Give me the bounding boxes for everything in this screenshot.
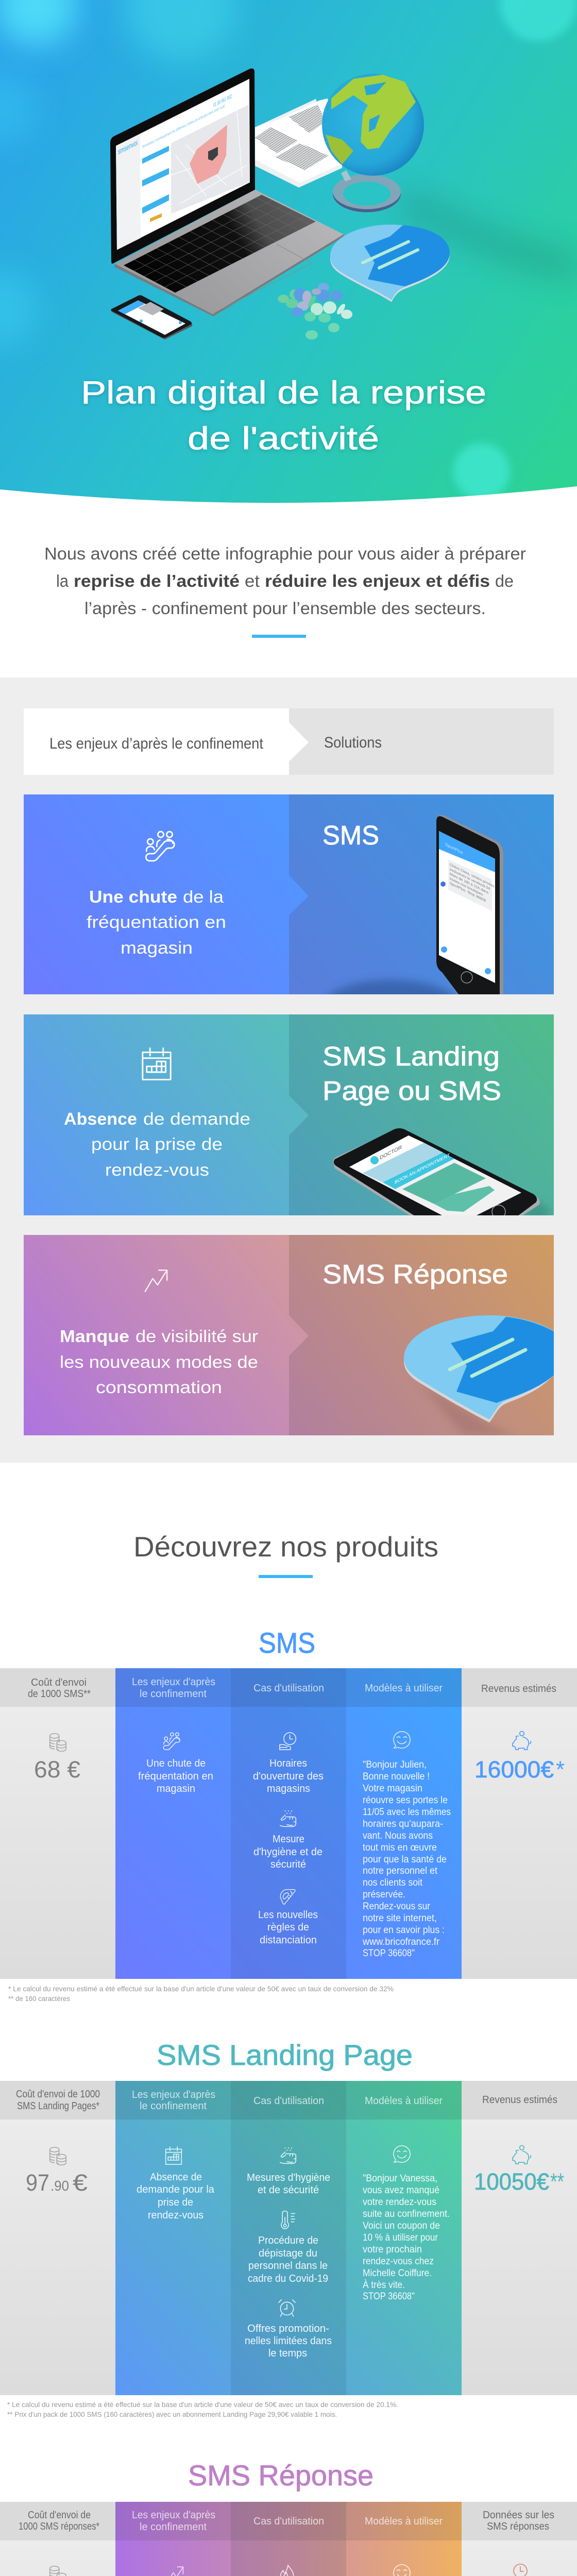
card text: visibility: les nouveaux modes de xyxy=(60,1352,258,1371)
templates column: 11/05 avec les mêmes xyxy=(363,1806,451,1818)
card text: no demand: Absence xyxy=(64,1109,137,1128)
column headers xyxy=(16,2089,557,2112)
use cases column: sécurité xyxy=(270,1859,306,1870)
challenge column xyxy=(137,2147,215,2221)
templates column: "Bonjour Vanessa, xyxy=(363,2173,437,2184)
use cases column: d'ouverture des xyxy=(253,1771,324,1782)
icon: escalator xyxy=(146,832,174,861)
table head row xyxy=(24,708,554,775)
column headers: le confinement xyxy=(140,2100,207,2112)
templates column: 10 % à utiliser pour xyxy=(363,2232,438,2243)
use cases column: distanciation xyxy=(260,1935,317,1946)
intro text block: Nous avons créé cette infographie pour vous aider à préparer xyxy=(44,544,526,563)
card: SMS Landing Page xyxy=(24,1014,554,1221)
card text: no demand xyxy=(64,1109,250,1179)
card: SMS xyxy=(24,794,554,994)
templates column: STOP 36608" xyxy=(363,2291,415,2302)
use cases column: personnel dans le xyxy=(248,2260,328,2272)
card title: SMS Landing Page ou SMS: SMS Landing xyxy=(323,1042,500,1072)
column headers: Coût d'envoi de 1000 xyxy=(16,2089,100,2100)
cost column: 97 xyxy=(26,2170,49,2196)
cost column xyxy=(34,1734,80,1783)
footnotes xyxy=(8,1985,394,2003)
card text: visibility: de visibilité sur xyxy=(135,1327,258,1346)
footnotes: ** de 160 caractères xyxy=(8,1994,70,2003)
illustration: landscape phone xyxy=(333,1128,551,1221)
column headers: SMS Landing Pages* xyxy=(17,2100,99,2112)
card: SMS Réponse xyxy=(24,1235,559,1435)
panel: SMS Landing Page product table xyxy=(0,2039,577,2418)
hero illustration: laptop xyxy=(110,69,344,316)
panel: SMS product table xyxy=(0,1626,577,2003)
column headers xyxy=(19,2510,554,2533)
revenue column: 16000€ xyxy=(474,1756,554,1783)
hero title: Plan digital de la reprise xyxy=(81,375,486,411)
templates column xyxy=(362,1732,451,1959)
footnotes: * Le calcul du revenu estimé a été effectué sur la base d'un article d'une valeur de 50€ avec un taux de conversion de 32% xyxy=(8,1985,394,1993)
column headers: Revenus estimés xyxy=(482,2094,557,2106)
challenge column: fréquentation en xyxy=(138,1771,213,1782)
card text: store traffic: de la xyxy=(183,887,224,906)
cost column: 68 € xyxy=(34,1756,80,1783)
column headers xyxy=(28,1676,556,1700)
revenue column xyxy=(474,1731,565,1783)
section background xyxy=(0,677,577,1463)
card title: SMS: SMS xyxy=(323,821,379,851)
intro text block xyxy=(44,544,526,618)
card text: store traffic: fréquentation en xyxy=(87,912,226,931)
templates column: "Bonjour Julien, xyxy=(363,1759,427,1770)
templates column: pour en savoir plus : xyxy=(363,1924,445,1936)
table head row: Les enjeux d’après le confinement xyxy=(49,735,264,752)
laptop screen intro copy: Remplissez numériquement les différents critères de sélection dans notre outil xyxy=(142,103,225,149)
phone sms sender: SportPlus xyxy=(445,841,463,855)
footnotes: ** Prix d'un pack de 1000 SMS (160 caractères) avec un abonnement Landing Page 29,90€ valable 1 mois. xyxy=(7,2410,337,2418)
card text: store traffic xyxy=(87,887,226,957)
templates column: tout mis en œuvre xyxy=(363,1842,437,1853)
hero gradient background xyxy=(0,0,577,503)
templates column: pour que la santé de xyxy=(363,1854,447,1865)
phone sms message: exclusives le vendredi 04 xyxy=(450,867,490,891)
footnotes: * Le calcul du revenu estimé a été effectué sur la base d'un article d'une valeur de 50€ avec un taux de conversion de 20.1%. xyxy=(7,2400,398,2409)
card text: no demand: de demande xyxy=(143,1109,250,1128)
templates column: rendez-vous chez xyxy=(363,2256,434,2267)
hero title: de l'activité xyxy=(188,421,379,456)
column headers: Revenus estimés xyxy=(481,1683,556,1694)
templates column: réouvre ses portes le xyxy=(363,1794,448,1806)
heading: discover products xyxy=(133,1531,438,1578)
hero illustration: candy hearts xyxy=(278,283,352,340)
illustration: speech bubble xyxy=(404,1315,559,1435)
card title: SMS Landing Page ou SMS xyxy=(323,1042,501,1106)
card text: store traffic: Une chute xyxy=(89,887,177,906)
card text: no demand: rendez-vous xyxy=(105,1160,209,1179)
card text: visibility: Manque xyxy=(60,1327,129,1346)
use cases column: Les nouvelles xyxy=(258,1909,318,1921)
templates column: préservée. xyxy=(363,1889,405,1900)
hero soft light spots xyxy=(0,0,577,500)
data column xyxy=(476,2564,562,2576)
cost column xyxy=(26,2147,88,2196)
revenue column xyxy=(474,2145,564,2195)
use cases column: Horaires xyxy=(269,1758,307,1769)
revenue column: 10050€ xyxy=(474,2168,549,2195)
card title: SMS Landing Page ou SMS: Page ou SMS xyxy=(323,1076,501,1106)
phone sms message: SportPlus. Stop 36608 xyxy=(450,880,486,903)
laptop screen phone number: 01 80 961 962 xyxy=(213,93,232,109)
templates column: Bonne nouvelle ! xyxy=(363,1771,430,1782)
product title: SMS Réponse xyxy=(188,2459,374,2492)
illustration: upright phone xyxy=(326,815,503,994)
use cases column: Mesure xyxy=(273,1834,304,1845)
templates column: Votre magasin xyxy=(363,1783,422,1794)
column headers: Cas d'utilisation xyxy=(253,2095,324,2107)
challenge column xyxy=(129,2567,222,2576)
templates column: notre site internet, xyxy=(363,1912,437,1924)
product title: SMS xyxy=(259,1626,315,1659)
templates column: Rendez-vous sur xyxy=(363,1901,430,1912)
column headers: Coût d'envoi xyxy=(31,1677,87,1688)
intro text block: l’après - confinement pour l’ensemble des secteurs. xyxy=(84,599,486,618)
card text: store traffic: magasin xyxy=(121,938,193,957)
challenge column: Absence de xyxy=(150,2172,202,2183)
panel: SMS Réponse product table xyxy=(0,2459,577,2576)
templates column: Voici un coupon de xyxy=(363,2220,440,2231)
use cases column: Procédure de xyxy=(258,2235,318,2246)
coloured columns xyxy=(115,2502,462,2576)
use cases column: nelles limitées dans xyxy=(245,2335,332,2347)
revenue column: * xyxy=(556,1756,565,1783)
column headers: Les enjeux d'après xyxy=(132,2089,215,2100)
use cases column: dépistage du xyxy=(259,2248,317,2259)
use cases column: règles de xyxy=(267,1922,309,1933)
side column backgrounds xyxy=(0,1668,577,1979)
side column backgrounds xyxy=(0,2081,577,2395)
templates column: www.bricofrance.fr xyxy=(362,1936,439,1947)
use cases column xyxy=(245,2148,332,2359)
phone sms message xyxy=(450,862,495,903)
cost column: € xyxy=(73,2170,88,2196)
templates column: vous avez manqué xyxy=(363,2184,439,2196)
hero illustration: open book xyxy=(255,98,342,188)
intro text block: la xyxy=(56,571,69,590)
templates column: horaires qu'aupara- xyxy=(363,1818,443,1829)
card text: visibility: consommation xyxy=(96,1378,222,1397)
table head row: Solutions xyxy=(324,734,382,751)
icon: rising chart xyxy=(145,1270,167,1292)
challenge column: prise de xyxy=(158,2197,193,2208)
hero title xyxy=(81,375,486,456)
panel: challenges and solutions xyxy=(0,677,577,1463)
templates column xyxy=(363,2565,448,2576)
templates column: votre rendez-vous xyxy=(363,2196,436,2208)
challenge column: Une chute de xyxy=(146,1758,206,1769)
column headers: le confinement xyxy=(140,2521,207,2533)
intro text block: et xyxy=(245,571,260,590)
hero illustration: globe xyxy=(322,74,424,212)
icon: calendar xyxy=(143,1048,171,1079)
templates column: suite au confinement. xyxy=(363,2208,450,2219)
column headers: SMS réponses xyxy=(487,2521,549,2532)
coloured columns xyxy=(115,1668,462,1979)
laptop screen logo: smsenvoi xyxy=(118,139,138,157)
column headers: Coût d'envoi de xyxy=(28,2510,91,2521)
card text: no demand: pour la prise de xyxy=(91,1134,223,1154)
challenge column xyxy=(138,1733,213,1794)
phone landing page brand: DOCTOR xyxy=(380,1144,402,1161)
templates column: votre prochain xyxy=(363,2244,422,2255)
coloured columns xyxy=(115,2081,462,2395)
challenge column: rendez-vous xyxy=(148,2210,203,2221)
panel: hero header xyxy=(0,0,577,503)
use cases column: le temps xyxy=(268,2348,307,2359)
use cases column: Mesures d'hygiène xyxy=(247,2172,330,2183)
column headers: Les enjeux d'après xyxy=(132,1676,215,1688)
column headers: de 1000 SMS** xyxy=(28,1688,91,1700)
heading: discover products: Découvrez nos produits xyxy=(133,1531,438,1563)
use cases column: magasins xyxy=(267,1783,310,1794)
templates column: notre personnel et xyxy=(363,1865,438,1876)
phone landing page banner: BOOK AN APPOINTMENT xyxy=(395,1153,450,1185)
column headers: Cas d'utilisation xyxy=(253,2516,324,2527)
intro text block: de xyxy=(495,571,514,590)
card title: SMS Réponse: SMS Réponse xyxy=(323,1260,508,1290)
column headers: Modèles à utiliser xyxy=(365,2516,443,2527)
column headers: Les enjeux d'après xyxy=(132,2510,215,2521)
use cases column: Offres promotion- xyxy=(247,2323,329,2334)
challenge column: magasin xyxy=(157,1783,195,1794)
phone sms message: toutes nos boutiques xyxy=(450,876,483,897)
card text: visibility xyxy=(60,1327,258,1397)
footnotes xyxy=(7,2400,398,2418)
templates column xyxy=(363,2146,450,2302)
cost column: .90 xyxy=(50,2178,69,2194)
use cases column: cadre du Covid-19 xyxy=(248,2273,328,2284)
challenge column: demande pour la xyxy=(137,2184,215,2195)
phone sms message: Chère Clara, ventes privées xyxy=(450,862,495,889)
templates column: STOP 36608" xyxy=(363,1947,415,1959)
side column backgrounds xyxy=(0,2502,577,2576)
column headers: Données sur les xyxy=(483,2510,554,2521)
templates column: Michelle Coiffure. xyxy=(363,2267,432,2279)
hero illustration: phone xyxy=(111,295,192,340)
intro text block: réduire les enjeux et défis xyxy=(265,571,490,590)
templates column: nos clients soit xyxy=(363,1877,423,1888)
use cases column: d'hygiène et de xyxy=(253,1846,323,1858)
intro text block: reprise de l’activité xyxy=(74,571,240,590)
product title: SMS Landing Page xyxy=(157,2039,413,2071)
column headers: 1000 SMS réponses* xyxy=(19,2521,99,2532)
column headers: Modèles à utiliser xyxy=(365,1683,443,1694)
column headers: le confinement xyxy=(140,1688,207,1700)
use cases column xyxy=(253,1733,324,1946)
hero illustration: speech bubble xyxy=(330,225,450,302)
use cases column: et de sécurité xyxy=(258,2184,319,2196)
cost column xyxy=(31,2566,82,2576)
templates column: vant. Nous avons xyxy=(363,1830,433,1841)
use cases column xyxy=(250,2565,327,2576)
column headers: Modèles à utiliser xyxy=(365,2095,443,2107)
templates column: À très vite. xyxy=(363,2279,405,2291)
revenue column: ** xyxy=(550,2168,564,2195)
phone sms message: Mars de 18h à 21h dans xyxy=(450,871,489,895)
column headers: Cas d'utilisation xyxy=(253,1683,324,1694)
